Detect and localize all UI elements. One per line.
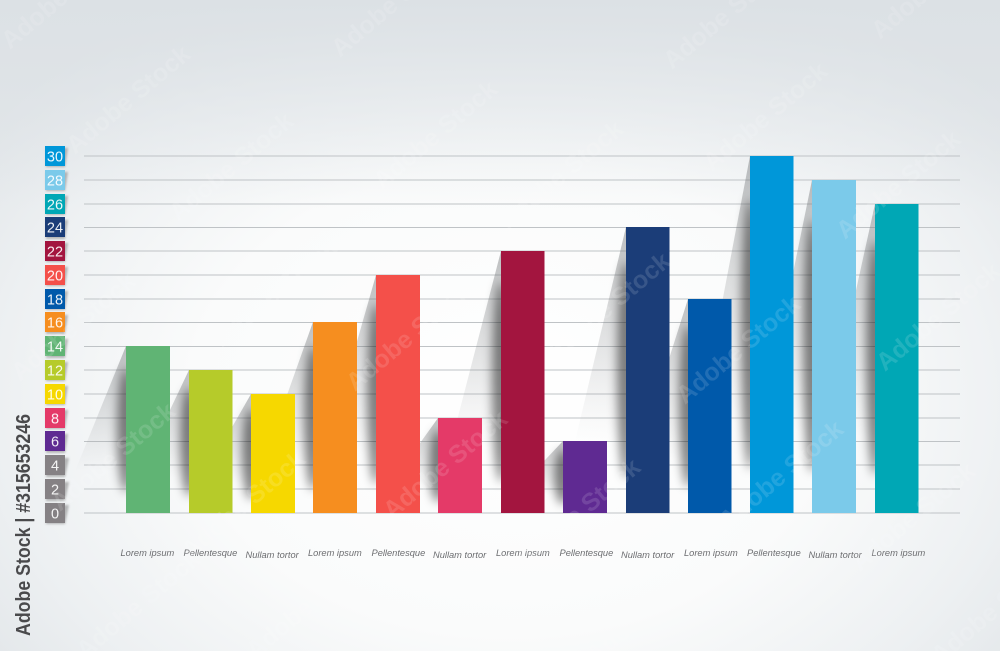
x axis labels: Lorem ipsum — [308, 548, 362, 558]
y axis badges: 4 — [51, 458, 59, 474]
watermarks: Adobe Stock — [831, 125, 966, 245]
x axis labels: Pellentesque — [747, 548, 801, 558]
x axis labels: Pellentesque — [560, 548, 613, 558]
watermarks: Adobe Stock — [164, 107, 299, 227]
x axis labels: Nullam tortor — [621, 550, 675, 560]
watermarks: Adobe Stock — [714, 415, 849, 535]
watermarks: Adobe Stock — [378, 405, 513, 525]
bars — [126, 156, 918, 513]
y axis badges: 8 — [51, 412, 59, 428]
x axis labels: Lorem ipsum — [684, 548, 738, 558]
y axis badges: 18 — [47, 292, 63, 308]
x axis labels: Nullam tortor — [808, 550, 863, 560]
y axis badges: 22 — [47, 244, 63, 260]
x axis labels: Nullam tortor — [246, 550, 300, 560]
y axis badges: 28 — [47, 174, 63, 190]
watermarks: Adobe Stock — [208, 233, 343, 353]
watermarks: Adobe Stock — [368, 75, 503, 195]
x axis labels — [120, 548, 925, 560]
y axis badges: 2 — [51, 482, 59, 498]
grid lines — [84, 156, 960, 513]
x axis labels: Pellentesque — [184, 548, 237, 558]
watermarks: Adobe Stock — [176, 445, 311, 565]
watermarks: Adobe Stock — [6, 267, 141, 387]
bar shadows — [58, 156, 884, 513]
watermarks: Adobe Stock — [671, 290, 806, 410]
x axis labels: Nullam tortor — [433, 550, 487, 560]
y axis badges: 16 — [47, 316, 63, 332]
y axis badges: 14 — [47, 340, 63, 356]
watermarks: Adobe Stock — [494, 115, 629, 235]
watermarks: Adobe Stock — [511, 453, 646, 573]
x axis labels: Lorem ipsum — [496, 548, 550, 558]
y axis badges: 6 — [51, 434, 59, 450]
y axis badges: 10 — [47, 388, 63, 404]
watermarks: Adobe Stock — [61, 40, 196, 160]
x axis labels: Lorem ipsum — [120, 548, 174, 558]
watermarks: Adobe Stock — [541, 247, 676, 367]
y axis badges: 30 — [47, 150, 63, 166]
y axis badges: 26 — [47, 198, 63, 214]
y axis badges — [45, 146, 69, 524]
watermarks: Adobe Stock — [698, 57, 833, 177]
y axis badges: 12 — [47, 364, 63, 380]
x axis labels: Lorem ipsum — [872, 548, 925, 558]
y axis badges: 0 — [51, 506, 59, 522]
stock id vertical text: Adobe Stock | #315653246 — [13, 414, 35, 636]
x axis labels: Pellentesque — [372, 548, 425, 558]
watermarks: Adobe Stock — [846, 457, 981, 577]
watermarks: Adobe Stock — [46, 397, 181, 517]
watermarks: Adobe Stock — [341, 277, 476, 397]
y axis badges: 24 — [47, 220, 63, 236]
y axis badges: 20 — [47, 268, 63, 284]
